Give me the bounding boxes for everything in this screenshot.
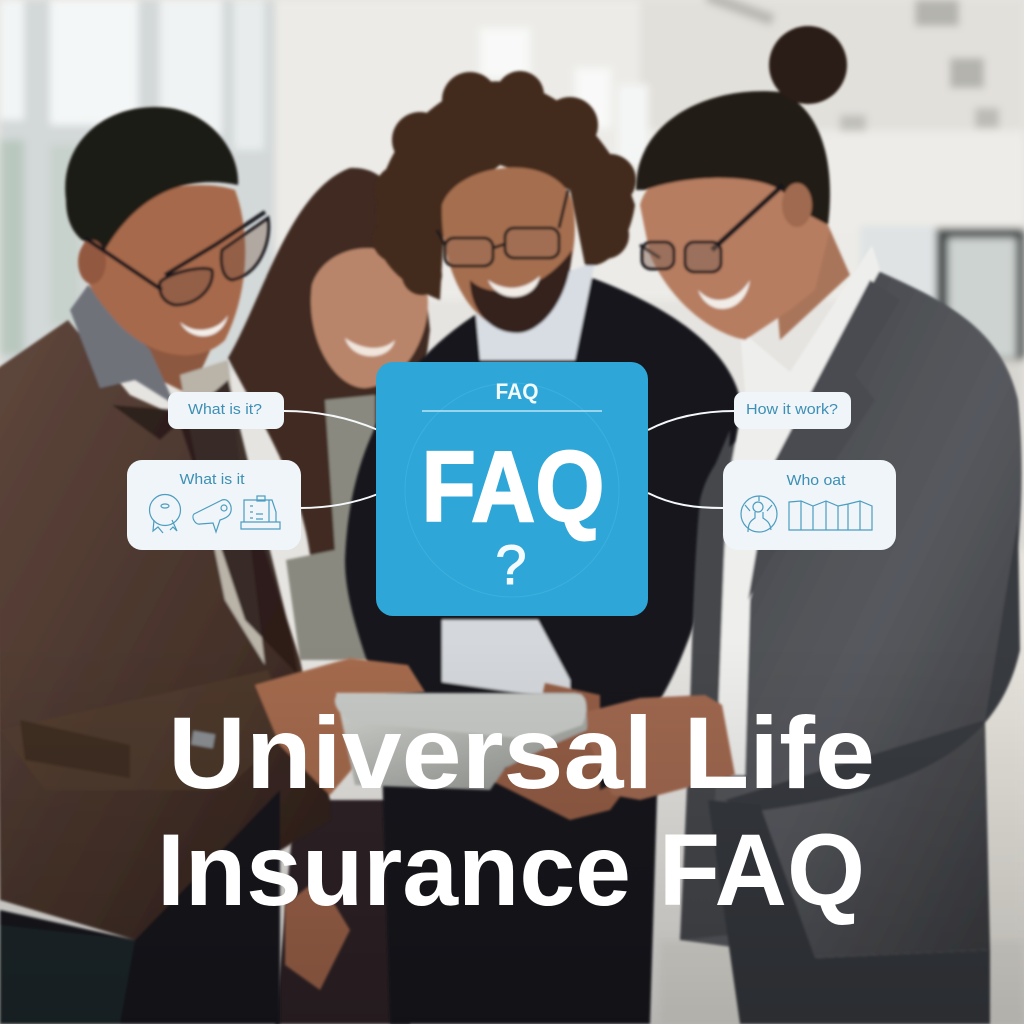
- curly hair: [373, 71, 636, 300]
- icon: folded map: [789, 501, 872, 530]
- person: center man in black suit: [345, 71, 742, 1024]
- person: woman in back: [228, 168, 430, 1024]
- tablet held by the group: [285, 683, 735, 990]
- connector lines: [284, 411, 735, 508]
- card small heading: FAQ: [496, 379, 538, 404]
- person: man on left in brown blazer: [0, 107, 425, 1024]
- face: [82, 185, 245, 355]
- panel: central FAQ card: [376, 362, 648, 616]
- title: [157, 696, 875, 927]
- icon: person in circle: [741, 496, 777, 532]
- neck: [120, 300, 215, 395]
- callout: What is it?: What is it?: [188, 402, 262, 418]
- bottom darkening: [0, 640, 1024, 1024]
- title: Universal Life: [168, 696, 875, 810]
- glasses: [437, 190, 568, 266]
- panel: What is it with icons: [127, 460, 301, 550]
- panel: What is it with icons: What is it: [180, 472, 244, 488]
- trousers: [708, 800, 990, 1024]
- icon: tag: [193, 500, 231, 532]
- callout: What is it?: [168, 392, 284, 429]
- icon: question mark: ?: [495, 533, 527, 596]
- neck: [770, 220, 850, 340]
- callout: How it work?: [734, 392, 851, 429]
- callout: How it work?: How it work?: [746, 402, 838, 418]
- icon: ribbon badge: [150, 494, 180, 533]
- card large heading: FAQ: [422, 431, 604, 543]
- person: man on right in grey blazer: [636, 26, 1022, 1024]
- hand: [255, 658, 425, 795]
- title: Insurance FAQ: [157, 813, 865, 927]
- panel: Who oat with icons: [723, 460, 896, 550]
- panel: Who oat with icons: Who oat: [786, 473, 846, 489]
- face: [640, 157, 830, 340]
- icon: clipboard: [241, 496, 280, 529]
